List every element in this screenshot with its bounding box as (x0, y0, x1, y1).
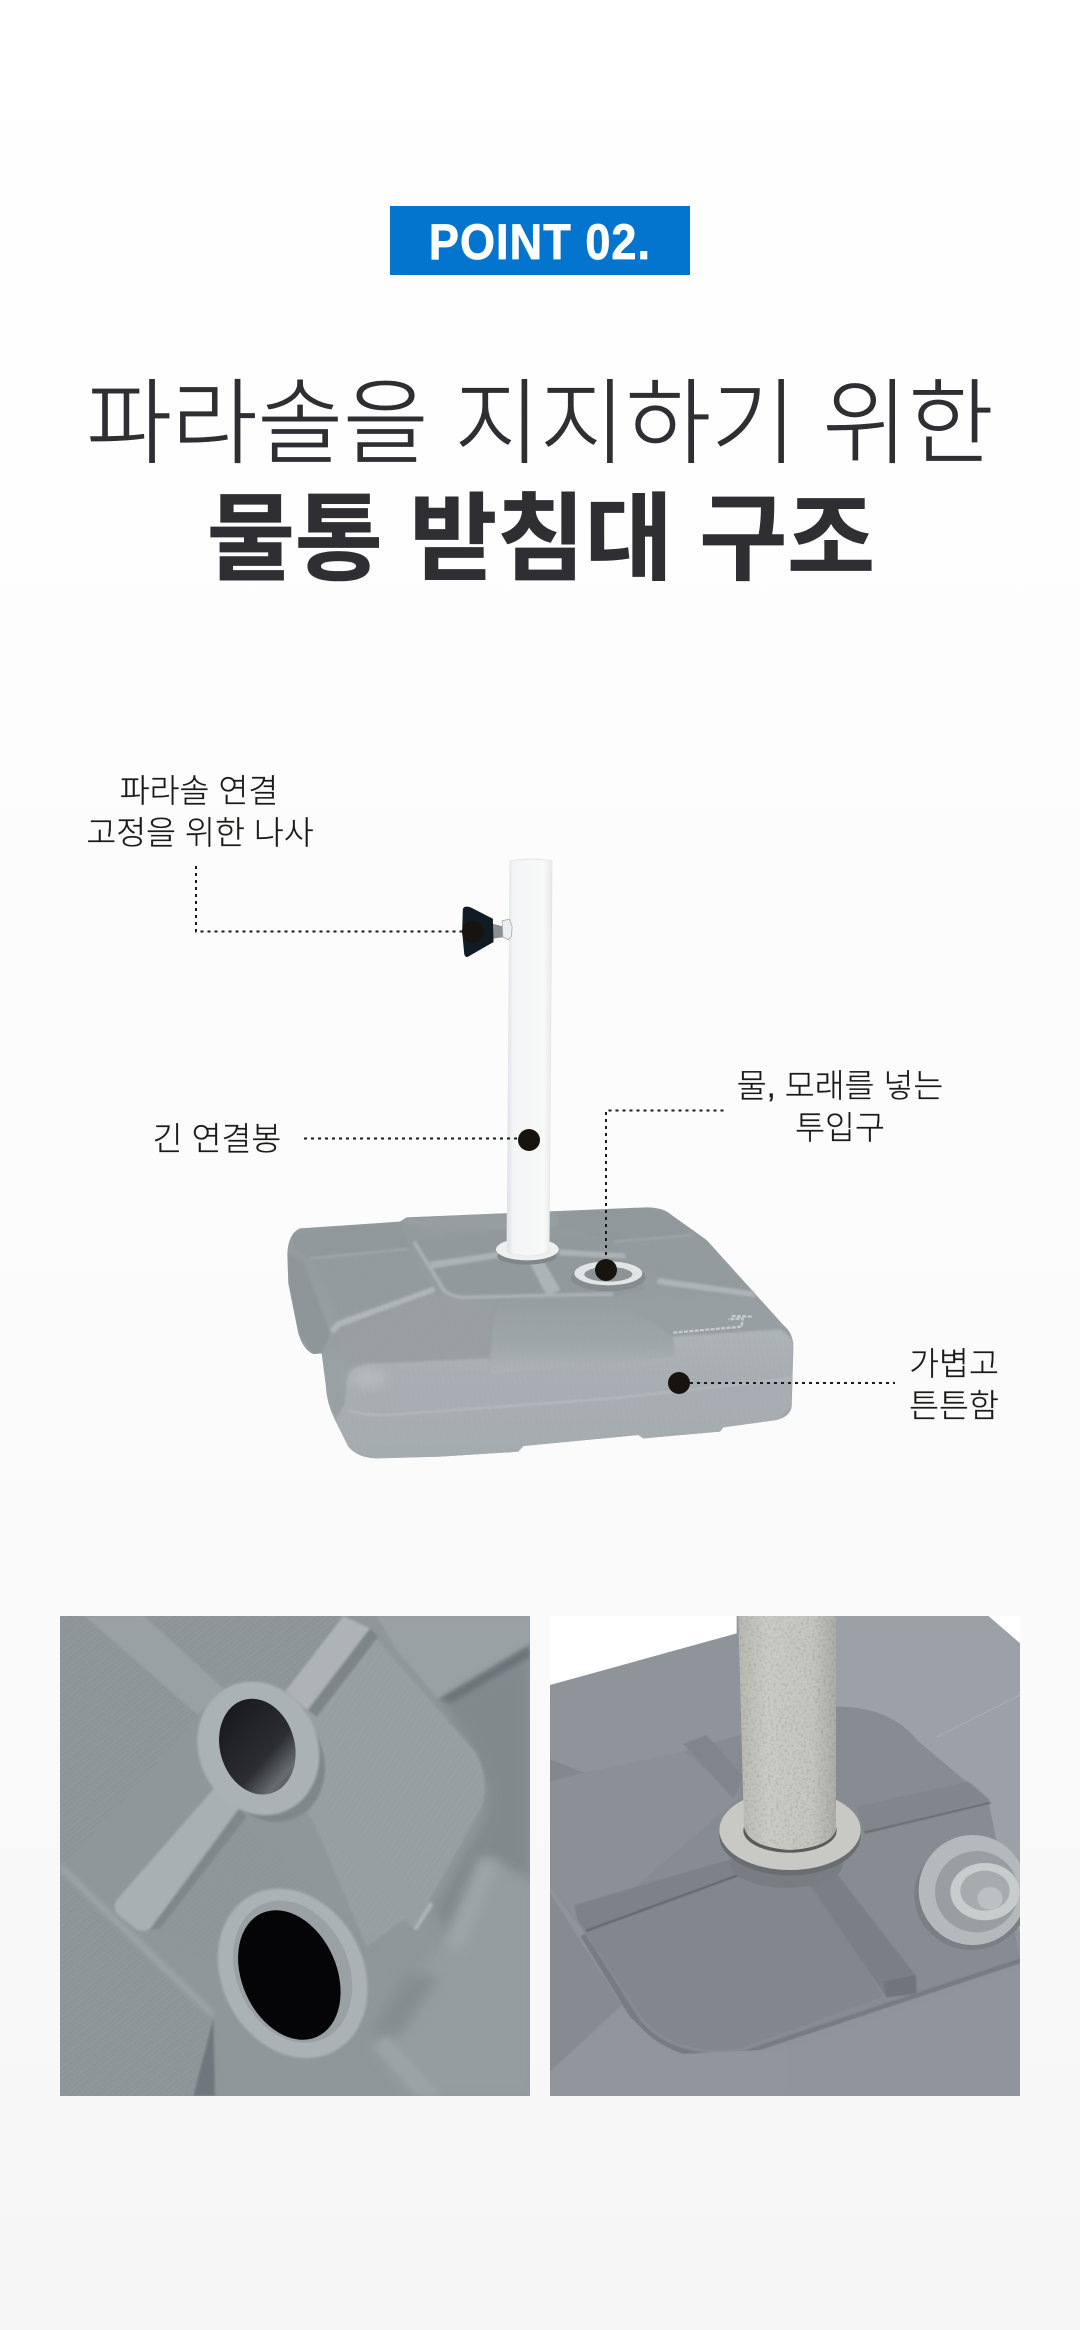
title: 파라솔을 지지하기 위한 (86, 372, 994, 476)
callout: light and sturdy: 가볍고 (909, 1346, 999, 1382)
top right surface (835, 1616, 1020, 1933)
callout: light and sturdy (668, 1346, 999, 1424)
base body (280, 1207, 800, 1460)
callout: inlet: 물, 모래를 넣는 (737, 1068, 943, 1104)
photo: close-up of base openings (60, 1616, 530, 2096)
photo: pole collar and filler cap (550, 1616, 1020, 2096)
callout: long pole: 긴 연결봉 (153, 1121, 281, 1157)
pole (507, 859, 552, 1256)
badge: POINT 02.: POINT 02. (429, 215, 651, 271)
callout: screw: 고정을 위한 나사 (86, 815, 314, 851)
callout: inlet (595, 1068, 943, 1281)
callout: inlet: 투입구 (795, 1110, 885, 1146)
product: umbrella base with pole (280, 859, 800, 1460)
washer and pole (719, 1616, 861, 1888)
right panel (307, 1616, 530, 2096)
ribs (85, 1616, 433, 1931)
callout: screw (86, 773, 484, 943)
title: 물통 받침대 구조 (207, 487, 875, 593)
filler cap (571, 1261, 646, 1291)
top ring (176, 1661, 344, 1840)
cross ribs (575, 1735, 991, 1997)
knob screw (462, 907, 512, 957)
callout: screw: 파라솔 연결 (120, 773, 278, 809)
callout: long pole (153, 1121, 540, 1157)
bottom ring (189, 1862, 397, 2085)
callout: light and sturdy: 튼튼함 (909, 1388, 999, 1424)
lower panel edge (60, 1867, 215, 2096)
filler cap (914, 1835, 1029, 1950)
rim and ribs (348, 1242, 793, 1415)
badge: POINT 02. (390, 206, 690, 275)
raised centre panel (550, 1707, 1020, 2096)
title (86, 372, 994, 593)
upper left textured field (60, 1616, 383, 2096)
